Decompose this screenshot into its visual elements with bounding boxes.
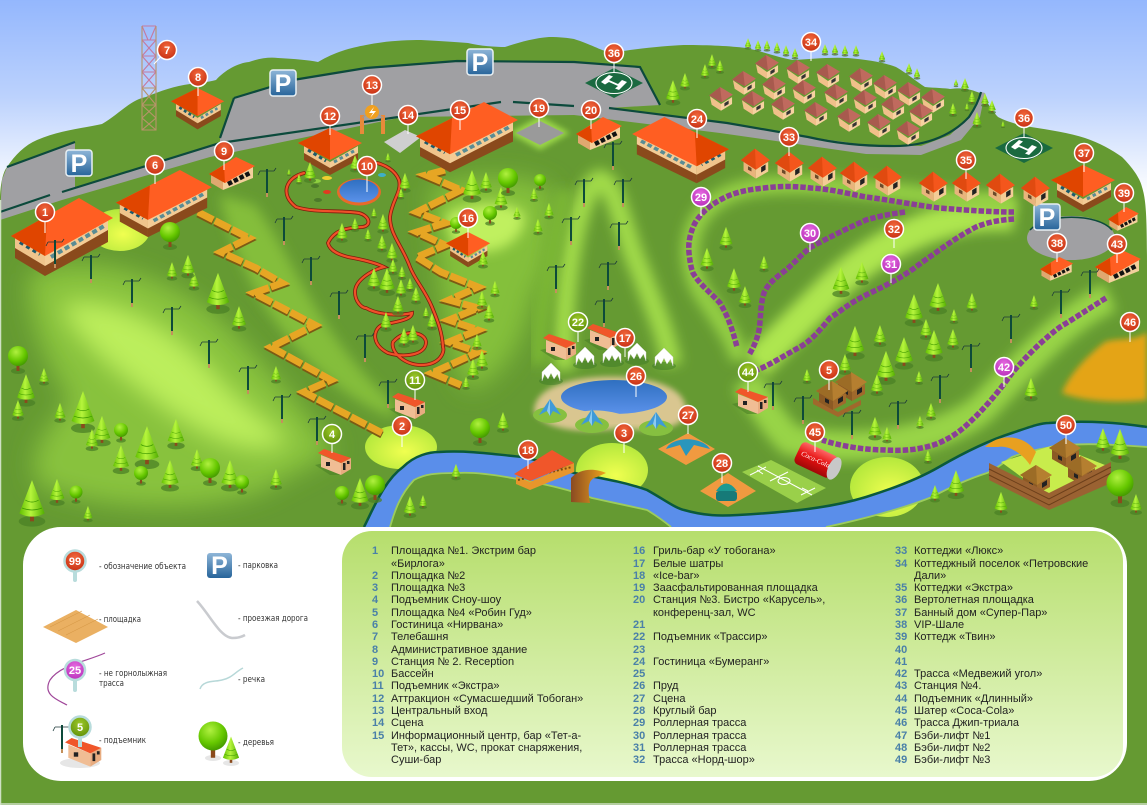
list column 1: 11 [372,680,384,692]
marker 29 [692,188,710,216]
platforms 14 and 19 [384,116,570,153]
legend: non-ski trail: - не горнолыжная [99,669,167,679]
list column 3: Дали» [914,570,946,582]
lift houses [315,324,768,475]
list column 1: 3 [372,582,378,594]
marker 5 [820,360,838,390]
list column 1: 1 [372,545,378,557]
list column 1: Подъемник «Экстра» [391,680,499,692]
marker 43: 43 [1111,239,1123,251]
list column 2: 17 [633,558,645,570]
jeep trial track [1062,332,1147,402]
marker 8 [188,68,208,96]
marker 20 [582,100,600,129]
stations [209,117,1141,283]
marker 31 [882,254,900,283]
list column 3: Подъемник «Длинный» [914,693,1033,705]
marker 36 east: 36 [1018,113,1030,125]
marker 16 [458,208,478,238]
legend: object marker: - обозначение объекта [99,562,186,572]
marker 13: 13 [366,80,378,92]
helipads [585,68,1053,163]
list column 3: 35 [895,582,907,594]
list column 1: Станция № 2. Reception [391,656,514,668]
marker 28 [712,454,732,483]
marker 32: 32 [888,224,900,236]
list column 1: Площадка №3 [391,582,465,594]
road and parking [0,61,1115,260]
list column 1: 4 [372,594,379,606]
list column 2: 19 [633,582,645,594]
list column 2: Роллерная трасса [653,717,747,729]
TV tower [142,26,156,130]
marker 14 [398,106,418,134]
legend: object marker [64,550,186,580]
list column 2: 23 [633,644,645,656]
list column 1: Сцена [391,717,424,729]
marker 9: 9 [221,146,227,158]
white tents [539,343,676,385]
marker 12: 12 [324,111,336,123]
marker 17 [616,328,634,357]
list column 1: Аттракцион «Сумасшедший Тобоган» [391,693,583,705]
list column 3: 49 [895,754,907,766]
marker 37: 37 [1078,148,1090,160]
parking icons [66,49,1060,232]
legend: river [200,668,265,689]
list column 1: 10 [372,668,384,680]
marker 34 [802,32,820,61]
list column 3: 37 [895,607,907,619]
legend: river: - речка [238,675,265,685]
list column 3: 45 [895,705,907,717]
list column 3: 47 [895,730,907,742]
marker 50: 50 [1060,420,1072,432]
legend: trees: - деревья [238,738,274,748]
legend: road: - проезжая дорога [238,614,308,624]
marker 6: 6 [152,160,158,172]
marker 15 [450,100,470,130]
list column 2: 26 [633,680,645,692]
marker 10 [358,156,376,192]
marker 7 [154,40,176,64]
marker 30 [800,224,820,252]
list column 2: Сцена [653,693,686,705]
lift poles [46,141,1099,445]
marker 22: 22 [572,317,584,329]
marker 34: 34 [805,37,818,49]
list column 2: Трасса «Норд-шор» [653,754,755,766]
yellow platforms [90,209,924,517]
list column 3: 42 [895,668,907,680]
marker 18: 18 [522,445,534,457]
list column 3: 36 [895,594,907,606]
cottage village [709,55,945,145]
marker 24 [688,110,706,138]
legend: non-ski trail: трасса [99,679,124,689]
list column 2: 21 [633,619,645,631]
list column 3: Коттедж «Твин» [914,631,995,643]
legend: parking: P [211,552,228,580]
marker 18 [518,440,538,469]
marker 35: 35 [960,155,972,167]
ice bar [514,450,574,490]
hotels [11,102,729,276]
list column 2: Роллерная трасса [653,730,747,742]
marker 31: 31 [885,259,897,271]
legend: lift: 5 [77,722,83,734]
list column 3: 40 [895,644,907,656]
marker 20: 20 [585,105,597,117]
marker 38: 38 [1051,238,1063,250]
list column 2: конференц-зал, WC [653,607,756,619]
list column 2: Гриль-бар «У тобогана» [653,545,776,557]
marker 19: 19 [533,103,545,115]
list column 2: 27 [633,693,645,705]
cottages lux and extra [741,149,1050,207]
list column 3: 44 [895,693,908,705]
river [364,422,1147,527]
list column 1: Площадка №1. Экстрим бар [391,545,536,557]
list column 2: 22 [633,631,645,643]
marker 32 [884,220,904,248]
list column 3: Трасса «Медвежий угол» [914,668,1042,680]
central entrance arch [360,105,385,134]
list column 2: 25 [633,668,645,680]
marker 11 [406,370,424,400]
legend panel [23,527,1127,781]
marker 33 [780,128,798,156]
page edge [0,200,1147,805]
marker 12 [320,106,340,135]
football field [742,460,826,503]
list column 3: Шатер «Coca-Cola» [914,705,1014,717]
lake with beach [534,377,686,431]
list column 1: 8 [372,644,378,656]
marker 13 [362,76,382,105]
marker 42: 42 [998,362,1010,374]
marker 43 [1108,234,1126,263]
list column 3: Станция №4. [914,680,981,692]
marker 39: 39 [1118,188,1130,200]
marker 46: 46 [1124,317,1136,329]
marker 38 [1048,234,1066,262]
list column 2: 24 [633,656,646,668]
marker 2 [392,416,412,447]
bridge [571,470,606,503]
marker 4: 4 [329,429,336,441]
marker 19 [530,98,548,127]
sky [0,0,1147,195]
marker 8: 8 [195,72,201,84]
marker 44: 44 [742,367,755,379]
list column 3: 48 [895,742,907,754]
list column 1: 6 [372,619,378,631]
list column 3: Коттеджи «Люкс» [914,545,1003,557]
marker 50 [1056,416,1076,444]
list column 2: 30 [633,730,645,742]
marker 6 [146,156,164,184]
marker 1 [36,202,54,233]
list column 1: «Бирлога» [391,558,445,570]
marker 2: 2 [399,421,405,433]
roller chain right [417,170,478,387]
list column 2: 16 [633,545,645,557]
marker 42 [994,358,1014,387]
list column 2: Подъемник «Трассир» [653,631,767,643]
legend: parking [207,552,278,580]
marker 36 east [1014,108,1034,137]
list column 2: 31 [633,742,645,754]
list column 1: 9 [372,656,378,668]
blue tents [533,399,673,436]
marker 29: 29 [695,192,707,204]
list column 1: Тет», кассы, WC, прокат снаряжения, [391,742,582,754]
marker 24: 24 [691,114,704,126]
list column 1: 5 [372,607,378,619]
list column 3: 38 [895,619,907,631]
legend: road [197,601,308,638]
list column 1: Информационный центр, бар «Тет-а- [391,730,582,742]
marker 7: 7 [164,45,170,57]
list column 2: Станция №3. Бистро «Карусель», [653,594,825,606]
legend: platform [43,610,141,643]
list column 3: 41 [895,656,907,668]
list column 2: Гостиница «Бумеранг» [653,656,769,668]
list column 3: 39 [895,631,907,643]
round bar 28 [700,473,756,507]
trees [8,38,1142,527]
coca-cola tent: Coca-Cola [800,450,831,470]
roller tracks [689,186,1106,450]
list column 2: Роллерная трасса [653,742,747,754]
marker 1: 1 [42,207,48,219]
sauna resort 50 [985,437,1111,510]
list column 2: 28 [633,705,645,717]
roller chain left [198,212,382,435]
pool [311,173,386,206]
list column 3: 43 [895,680,907,692]
list column 3: 46 [895,717,907,729]
list column 1: 14 [372,717,385,729]
list column 2 [633,545,825,766]
legend: parking: - парковка [238,561,278,571]
marker 37 [1074,144,1094,172]
list column 1: Площадка №4 «Робин Гуд» [391,607,532,619]
marker 10: 10 [361,161,373,173]
list column 1: Гостиница «Нирвана» [391,619,503,631]
Robin Hood platform [813,372,867,417]
slide attraction [286,163,443,365]
marker 35 [956,150,976,179]
legend: lift [53,716,146,768]
list column 2: 20 [633,594,645,606]
list column 1: Подъемник Сноу-шоу [391,594,502,606]
marker 26: 26 [630,371,642,383]
marker 36 north [604,44,624,72]
list column 3: 33 [895,545,907,557]
list column 1: 7 [372,631,378,643]
legend: trees [198,722,274,766]
list column 1: Площадка №2 [391,570,465,582]
list column 1: Бассейн [391,668,434,680]
list column 3: Бэби-лифт №3 [914,754,990,766]
legend: platform: - площадка [99,615,141,625]
list column 2: Заасфальтированная площадка [653,582,819,594]
list column 1: Телебашня [391,631,448,643]
marker 36 north: 36 [608,48,620,60]
marker 28: 28 [716,458,728,470]
marker 27 [678,406,698,434]
list column 3: VIP-Шале [914,619,964,631]
list column 3: Банный дом «Супер-Пар» [914,607,1047,619]
lodges [171,88,1115,267]
marker 3: 3 [621,428,627,440]
list column 3: Бэби-лифт №1 [914,730,990,742]
marker 44 [738,362,758,392]
list column 2: 32 [633,754,645,766]
marker 4 [322,424,342,453]
list column 2: Круглый бар [653,705,716,717]
list column 2: «Ice-bar» [653,570,699,582]
marker 14: 14 [402,110,415,122]
marker 45: 45 [809,427,821,439]
list column 2: 18 [633,570,645,582]
list column 2: Белые шатры [653,558,723,570]
list column 3: Вертолетная площадка [914,594,1035,606]
list column 3: Бэби-лифт №2 [914,742,990,754]
marker 17: 17 [619,333,631,345]
list column 1: 2 [372,570,378,582]
legend list panel [342,531,1123,777]
legend: lift: - подъемник [99,736,146,746]
list column 3 [895,545,1088,766]
marker 30: 30 [804,228,816,240]
list column 3: Коттеджи «Экстра» [914,582,1013,594]
marker 11: 11 [409,375,421,387]
coca-cola tent [793,441,845,482]
list column 3: 34 [895,558,908,570]
list column 1: 13 [372,705,384,717]
list column 2: Пруд [653,680,679,692]
marker 45 [806,422,824,452]
marker 5: 5 [826,365,832,377]
marker 26 [626,366,646,397]
marker 27: 27 [682,410,694,422]
list column 1 [372,545,583,766]
marker 33: 33 [783,132,795,144]
list column 1: 15 [372,730,384,742]
ski slope glows [29,177,1110,506]
marker 46 [1120,312,1140,342]
marker 3 [614,424,634,453]
marker 16: 16 [462,213,474,225]
marker 22 [568,312,588,342]
marker 39 [1114,184,1134,212]
legend: non-ski trail: 25 [69,665,81,677]
legend: non-ski trail [48,653,167,705]
list column 2: 29 [633,717,645,729]
stage 27 [658,433,715,465]
list column 1: 12 [372,693,384,705]
marker 15: 15 [454,105,466,117]
list column 3: Коттеджный поселок «Петровские [914,558,1088,570]
list column 3: Трасса Джип-триала [914,717,1020,729]
marker 9 [214,142,234,170]
list column 1: Административное здание [391,644,527,656]
legend: object marker: 99 [69,556,81,568]
list column 1: Центральный вход [391,705,488,717]
list column 1: Суши-бар [391,754,441,766]
